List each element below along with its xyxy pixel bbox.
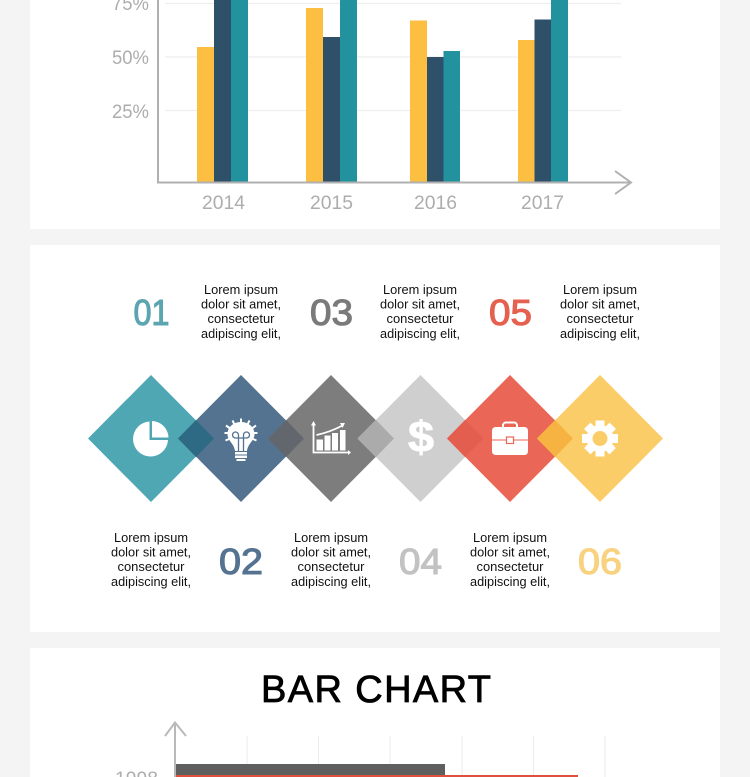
y axis labels: 50% (112, 48, 149, 69)
step text 06: Lorem ipsum (473, 531, 547, 545)
step text 01: adipiscing elit, (201, 327, 281, 341)
icon: light bulb (224, 418, 258, 461)
axes with arrow (158, 0, 631, 194)
icon: briefcase (492, 422, 528, 455)
step number 03: 03 (310, 292, 353, 333)
bars 2015 (306, 0, 357, 182)
step text 02 (111, 531, 191, 589)
step text 04 (291, 531, 371, 589)
icon: dollar: $ (408, 413, 434, 462)
x axis labels: 2015 (310, 193, 353, 214)
step text 02: Lorem ipsum (114, 531, 188, 545)
step text 06 (470, 531, 550, 589)
step text 03: dolor sit amet, (380, 298, 460, 312)
heading: BAR CHART (261, 669, 491, 711)
step text 05 (560, 283, 640, 341)
panel: column chart (30, 0, 720, 229)
x axis labels: 2016 (414, 193, 457, 214)
step text 01: dolor sit amet, (201, 298, 281, 312)
bars 1998 (176, 764, 578, 777)
step text 06: dolor sit amet, (470, 546, 550, 560)
icon: growth chart (311, 421, 351, 455)
step text 06: consectetur (476, 560, 544, 574)
step text 04: consectetur (298, 560, 364, 574)
panel: bar chart (30, 648, 720, 777)
step number 06: 06 (578, 541, 622, 582)
step text 05: adipiscing elit, (560, 327, 640, 341)
bars 2017 (518, 0, 568, 182)
diamonds row (88, 375, 663, 502)
panel: six steps (30, 245, 720, 632)
step text 05: consectetur (566, 312, 634, 326)
step text 04: Lorem ipsum (294, 531, 368, 545)
step text 01: Lorem ipsum (204, 283, 278, 297)
y axis labels: 25% (112, 102, 149, 123)
x axis labels: 2014 (202, 193, 245, 214)
icon: pie chart (133, 421, 168, 456)
step text 02: consectetur (118, 560, 184, 574)
bars 2014 (197, 0, 248, 182)
step text 04: adipiscing elit, (291, 575, 371, 589)
x axis labels: 2017 (521, 193, 564, 214)
step text 01: consectetur (208, 312, 274, 326)
step number 02: 02 (219, 541, 263, 582)
y axis labels (112, 0, 149, 123)
step text 02: dolor sit amet, (111, 546, 191, 560)
icon: gear (582, 420, 618, 456)
step text 05: Lorem ipsum (563, 283, 637, 297)
step text 04: dolor sit amet, (291, 546, 371, 560)
step text 03: adipiscing elit, (380, 327, 460, 341)
step number 04: 04 (399, 541, 442, 582)
step text 06: adipiscing elit, (470, 575, 550, 589)
bars 2016 (410, 20, 460, 182)
step text 03: consectetur (386, 312, 454, 326)
x axis labels (202, 193, 564, 214)
step number 01: 01 (134, 292, 170, 333)
step text 02: adipiscing elit, (111, 575, 191, 589)
step text 05: dolor sit amet, (560, 298, 640, 312)
step text 01 (201, 283, 281, 341)
step number 05: 05 (489, 292, 532, 333)
step text 03 (380, 283, 460, 341)
y axis with arrow (165, 722, 186, 777)
step text 03: Lorem ipsum (383, 283, 457, 297)
